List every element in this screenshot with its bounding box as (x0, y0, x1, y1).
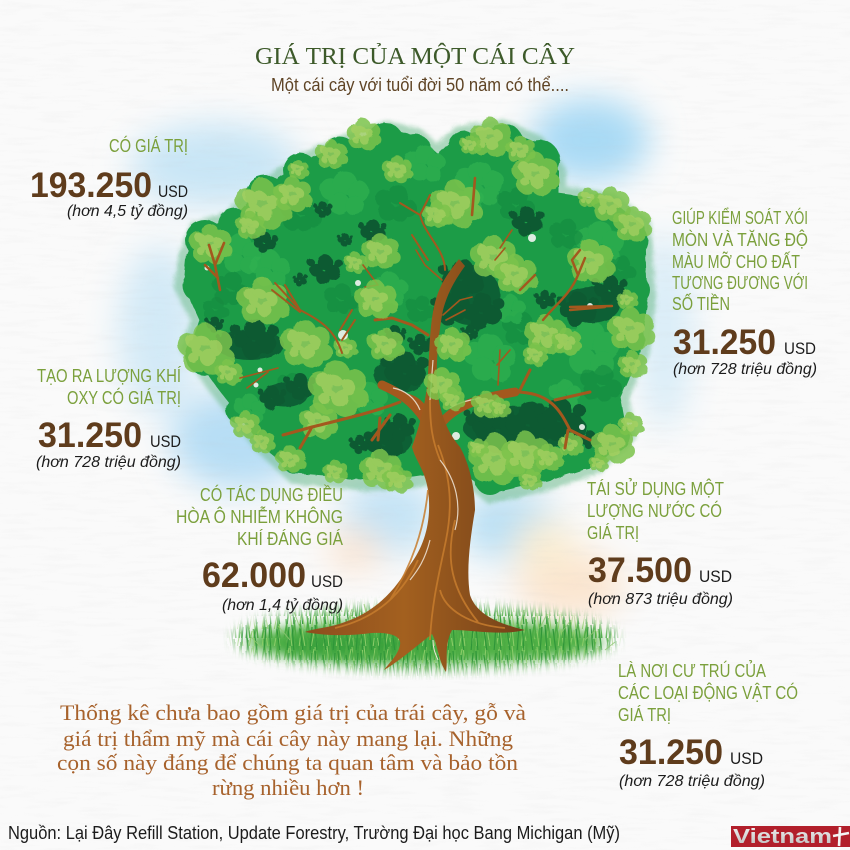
canopy (178, 117, 655, 500)
canopy gaps (204, 234, 593, 455)
stat: water reuse: USD (699, 567, 732, 586)
logo: Vietnam+ (731, 826, 850, 848)
stat: animal habitat: USD (730, 749, 763, 768)
stat: oxygen: TẠO RA LƯỢNG KHÍ (37, 366, 181, 386)
stat: water reuse: TÁI SỬ DỤNG MỘT (587, 478, 724, 499)
canopy brush texture (202, 145, 636, 424)
canopy shadows (205, 202, 628, 462)
stat: air pollution: KHÍ ĐÁNG GIÁ (237, 529, 343, 549)
stat: oxygen: OXY CÓ GIÁ TRỊ (67, 387, 181, 408)
stat: animal habitat: (hơn 728 triệu đồng) (619, 773, 765, 790)
stat: air pollution: 62.000 (202, 556, 306, 595)
stat: animal habitat: CÁC LOẠI ĐỘNG VẬT CÓ (618, 682, 798, 703)
stat: air pollution (176, 484, 343, 614)
stat: tree value: (hơn 4,5 tỷ đồng) (67, 203, 188, 220)
closing note: giá trị thẩm mỹ mà cái cây này mang lại. Những (63, 726, 513, 751)
stat: air pollution: USD (311, 572, 343, 591)
stat: air pollution: (hơn 1,4 tỷ đồng) (222, 597, 343, 614)
stat: tree value: CÓ GIÁ TRỊ (109, 135, 188, 156)
canopy halo (178, 123, 652, 500)
stat: soil erosion: USD (784, 339, 816, 358)
stat: soil erosion: 31.250 (673, 323, 776, 362)
stat: soil erosion: TƯƠNG ĐƯƠNG VỚI (672, 272, 808, 293)
stat: soil erosion (672, 207, 817, 378)
stat: water reuse: 37.500 (588, 551, 692, 590)
stat: soil erosion: (hơn 728 triệu đồng) (673, 361, 817, 378)
stat: water reuse: (hơn 873 triệu đồng) (588, 591, 733, 608)
stat: tree value (30, 135, 188, 220)
closing note: rừng nhiều hơn ! (212, 775, 364, 800)
branches (205, 178, 612, 448)
illustration: tree (178, 117, 655, 680)
stat: animal habitat: 31.250 (619, 733, 723, 772)
closing note: Thống kê chưa bao gồm giá trị của trái cây, gỗ và (60, 700, 526, 725)
stat: air pollution: CÓ TÁC DỤNG ĐIỀU (200, 484, 343, 505)
stat: animal habitat: LÀ NƠI CƯ TRÚ CỦA (618, 660, 766, 681)
canopy highlights (178, 117, 655, 493)
stat: soil erosion: MÀU MỠ CHO ĐẤT (672, 251, 800, 272)
foreground foliage (354, 279, 512, 418)
stat: water reuse (587, 478, 733, 608)
stat: water reuse: GIÁ TRỊ (587, 523, 639, 543)
logo: Vietnam+: Vietnam (733, 826, 832, 848)
stat: oxygen: USD (150, 432, 181, 451)
trunk (305, 259, 525, 672)
closing note: cọn số này đáng để chúng ta quan tâm và bảo tồn (57, 750, 518, 775)
stat: soil erosion: SỐ TIỀN (672, 293, 730, 314)
stat: tree value: 193.250 (30, 166, 152, 205)
title: GIÁ TRỊ CỦA MỘT CÁI CÂY (255, 43, 575, 70)
stat: oxygen: 31.250 (38, 416, 142, 455)
canopy rim lobes (182, 123, 650, 495)
grass (226, 598, 624, 679)
stat: soil erosion: MÒN VÀ TĂNG ĐỘ (672, 229, 808, 250)
source: Nguồn: Lại Đây Refill Station, Update Forestry, Trường Đại học Bang Michigan (Mỹ) (8, 823, 620, 843)
stat: air pollution: HÒA Ô NHIỄM KHÔNG (176, 506, 343, 527)
stat: tree value: USD (158, 182, 188, 201)
stat: soil erosion: GIÚP KIỂM SOÁT XÓI (672, 207, 808, 228)
subtitle: Một cái cây với tuổi đời 50 năm có thể.... (271, 75, 569, 95)
stat: oxygen (36, 366, 181, 471)
stat: water reuse: LƯỢNG NƯỚC CÓ (587, 500, 722, 521)
stat: oxygen: (hơn 728 triệu đồng) (36, 454, 181, 471)
stat: animal habitat (618, 660, 798, 790)
stat: animal habitat: GIÁ TRỊ (618, 705, 671, 725)
closing note (57, 700, 526, 800)
